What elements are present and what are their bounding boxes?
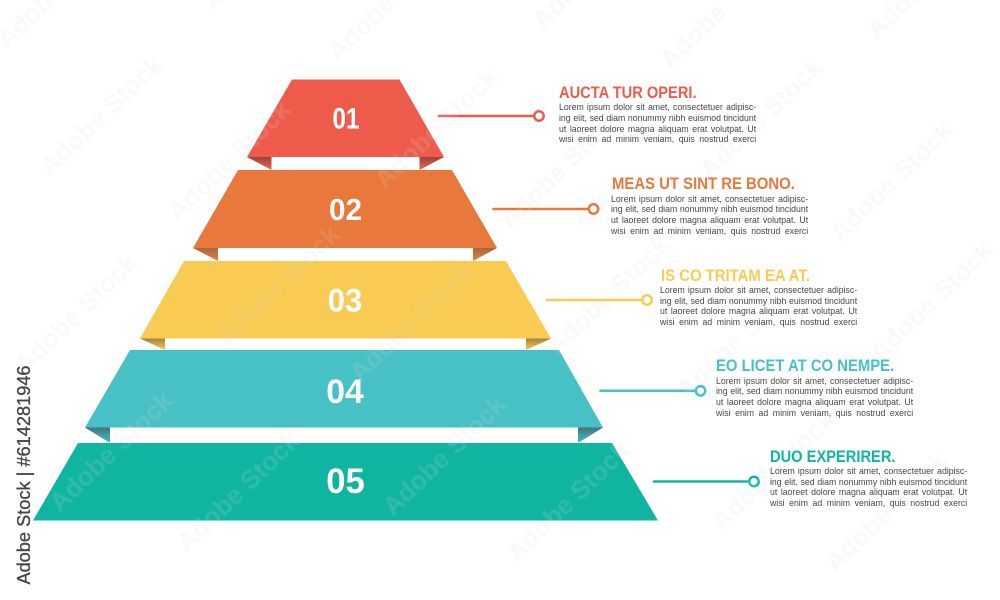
text: Adobe Stock (368, 62, 504, 194)
text: Adobe Stock (493, 102, 629, 234)
tier 4: 04 (326, 373, 364, 411)
connector 3 (547, 295, 652, 305)
callout 4 (716, 357, 914, 418)
connector 2 (494, 204, 598, 214)
tier 2 (193, 170, 497, 261)
callout 2 (611, 175, 808, 236)
text: Adobe Stock (670, 272, 806, 404)
callout 3 (660, 267, 858, 327)
body text 5 (770, 466, 968, 508)
text: Adobe Stock (705, 404, 841, 536)
text: Adobe Stock (161, 94, 297, 226)
text: Adobe Stock (33, 49, 169, 181)
tier 2: 02 (329, 192, 362, 227)
stock credit: Adobe Stock | #614281946 (14, 365, 34, 584)
tier 3 (140, 261, 551, 350)
heading 2: MEAS UT SINT RE BONO. (612, 175, 795, 193)
callout 1 (559, 84, 756, 144)
text: Adobe Stock (818, 445, 954, 577)
tier 3: 03 (328, 282, 362, 318)
tier 5: 05 (326, 462, 365, 501)
tier 4 (85, 350, 603, 443)
text: Adobe Stock (500, 435, 636, 567)
text: Adobe Stock (693, 52, 829, 184)
body text 2 (611, 194, 808, 236)
tier 1: 01 (332, 102, 360, 136)
text: Adobe Stock (43, 385, 179, 517)
callout 5 (770, 448, 968, 508)
text: Adobe Stock (540, 229, 676, 361)
connector 1 (439, 111, 544, 121)
text: Adobe Stock (823, 115, 959, 247)
connector 5 (654, 477, 759, 486)
text: Adobe Stock (8, 247, 144, 379)
heading 4: EO LICET AT CO NEMPE. (716, 357, 894, 375)
heading 1: AUCTA TUR OPERI. (559, 84, 697, 102)
tier 1 (247, 80, 444, 170)
connector 4 (600, 386, 705, 395)
heading 5: DUO EXPERIRER. (770, 448, 896, 466)
text: Adobe Stock (210, 219, 346, 351)
heading 3: IS CO TRITAM EA AT. (661, 267, 810, 285)
text: Adobe Stock (863, 235, 999, 367)
tier 5 (33, 443, 658, 520)
body text 4 (716, 376, 914, 418)
text: Adobe Stock (170, 425, 306, 557)
text: Adobe Stock (376, 389, 512, 521)
body text 3 (660, 285, 858, 327)
body text 1 (559, 102, 756, 144)
text: Adobe Stock (343, 255, 479, 387)
